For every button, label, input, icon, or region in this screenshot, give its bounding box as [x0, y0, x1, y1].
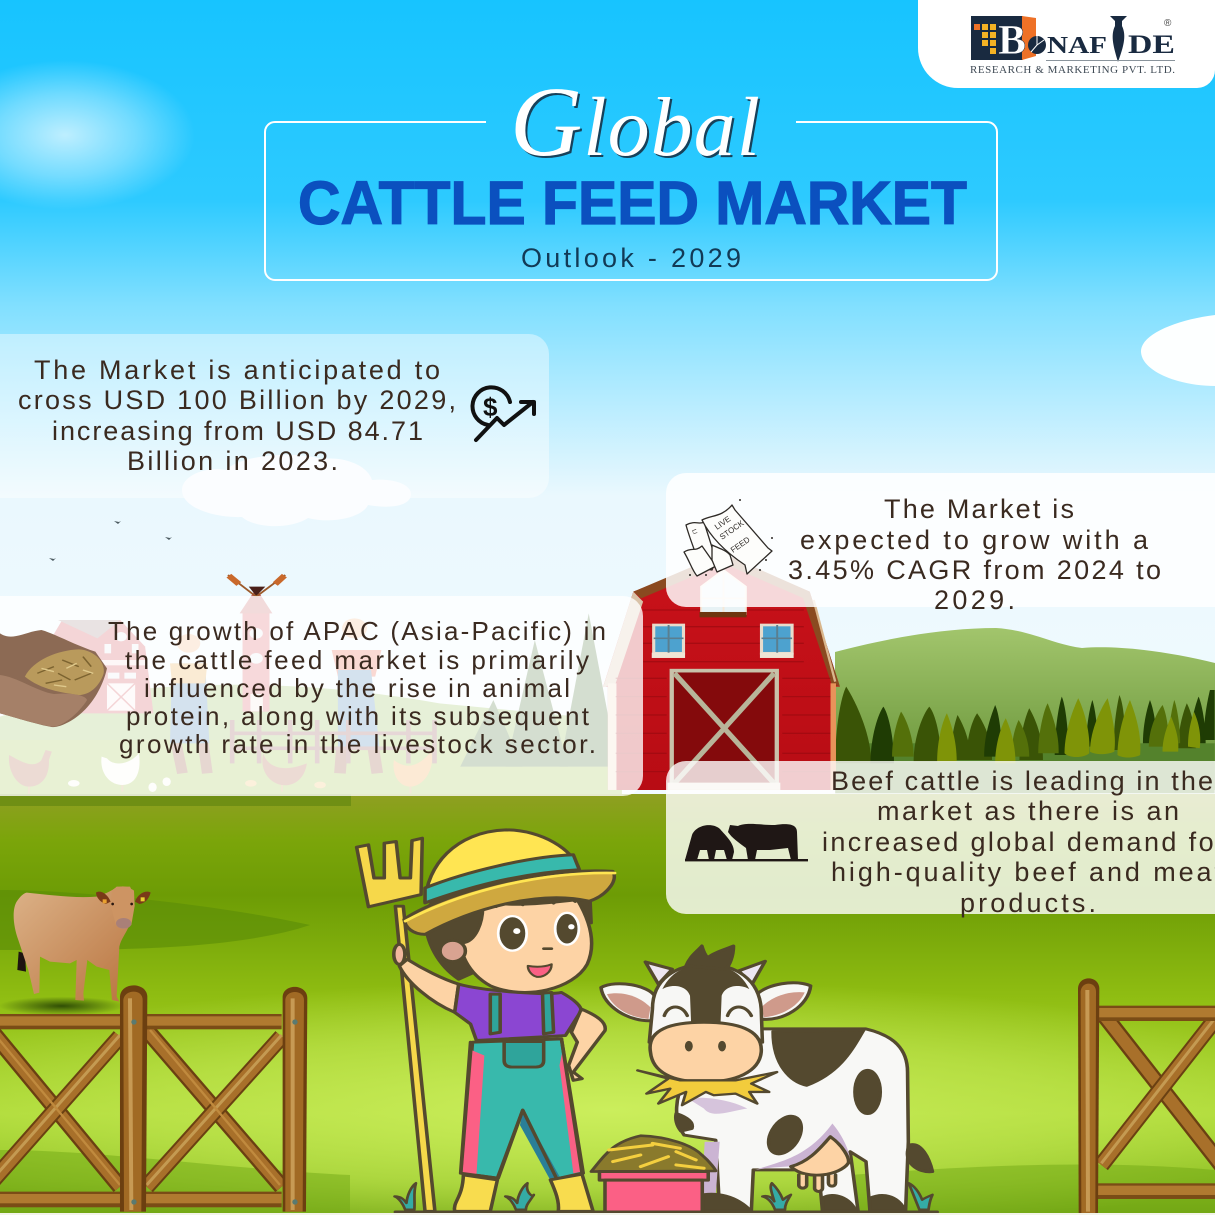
ground: grass field: [0, 794, 1215, 1215]
title frame: [265, 122, 997, 280]
text: beef cattle: Beef cattle is leading in the: [831, 766, 1213, 796]
ground line: [395, 1208, 937, 1215]
hay trough: [591, 1136, 716, 1212]
icon: dollar growth arrow: $: [483, 392, 498, 422]
text: USD 100 billion forecast: increasing from USD 84.71: [52, 416, 423, 446]
icon: livestock feed bags: LI: [690, 529, 698, 536]
cloud: right edge: [1141, 315, 1215, 386]
farmers: [170, 618, 381, 773]
strip: bottom edge: [0, 1213, 1215, 1215]
shirt and arms: [394, 944, 605, 1080]
pitchfork: [357, 838, 435, 1211]
icon: hands holding feed: [0, 630, 107, 727]
logo: wordmark: DE: [1128, 30, 1175, 59]
grass tufts: [395, 1183, 932, 1210]
cow: [601, 946, 932, 1211]
wooden fence: [230, 720, 435, 763]
tree line: [835, 687, 1215, 793]
hill: right side: [835, 628, 1215, 790]
pine trees: [460, 613, 618, 767]
text: CAGR: expected to grow with a: [800, 525, 1149, 555]
fence: left: [0, 985, 307, 1212]
text: beef cattle: market as there is an: [877, 796, 1179, 826]
chickens: [9, 750, 432, 795]
cow body: [677, 1029, 908, 1211]
subheading: Outlook 2029: Outlook - 2029: [521, 243, 741, 273]
text: APAC growth: protein, along with its subsequent: [126, 701, 590, 731]
farmer legs and overalls: [461, 1039, 583, 1180]
fence: right: [1078, 978, 1215, 1213]
panel: USD 100 billion forecast: [0, 334, 549, 498]
barn gable window: [700, 570, 747, 617]
logo: wordmark: NAF: [1047, 33, 1107, 59]
farmer head: [425, 878, 592, 992]
heading: Cattle Feed Market: CATTLE FEED MARKET: [298, 169, 967, 237]
text: CAGR: [788, 494, 1161, 615]
background: sky: [0, 0, 1215, 800]
hay in mouth: [637, 1070, 777, 1105]
icon: livestock feed bags: FEED: [729, 535, 752, 555]
panel: APAC growth: [0, 596, 643, 796]
distant farm scene: [0, 575, 622, 797]
icon: livestock feed bags: LIVE: [713, 514, 732, 532]
barn roof: [603, 553, 840, 790]
panel: CAGR: [666, 473, 1215, 607]
text: APAC growth: The growth of APAC (Asia-Pacific) in: [108, 616, 606, 646]
cow horns and ears: [645, 961, 765, 984]
text: APAC growth: the cattle feed market is primarily: [125, 645, 589, 675]
logo: wordmark: ®: [1164, 18, 1172, 29]
photo: brown cow with shadow: [0, 886, 151, 1015]
text: APAC growth: [108, 616, 606, 759]
text: CAGR: The Market is: [884, 494, 1074, 524]
icon: livestock feed bags: STOCK: [718, 518, 746, 542]
silo and windmill: [228, 575, 285, 712]
logo: B mark: B: [998, 18, 1026, 64]
logo: tagline: RESEARCH & MARKETING PVT. LTD.: [970, 64, 1175, 76]
text: CAGR: 2029.: [934, 585, 1015, 615]
cloud: centre overlapping panel: [182, 455, 411, 526]
panel: beef cattle: [666, 761, 1215, 914]
icon: black cattle silhouettes: [685, 824, 808, 861]
text: APAC growth: growth rate in the livestock sector.: [119, 729, 596, 759]
hat: [404, 830, 615, 934]
birds: [49, 521, 172, 561]
logo card: [918, 0, 1215, 88]
text: beef cattle: products.: [960, 888, 1096, 918]
boots: [454, 1174, 593, 1211]
text: USD 100 billion forecast: The Market is anticipated to: [34, 355, 440, 385]
text: APAC growth: influenced by the rise in animal: [144, 673, 570, 703]
icon: dollar growth arrow: [472, 387, 534, 440]
cloud: blurred top left: [0, 60, 195, 210]
text: beef cattle: increased global demand for: [822, 827, 1215, 857]
logo: wordmark: [1028, 16, 1175, 62]
barn door: [667, 671, 780, 790]
text: CAGR: 3.45% CAGR from 2024 to: [788, 555, 1161, 585]
heading: Global: Global: [510, 66, 760, 177]
barn windows: [652, 625, 794, 658]
illustration: farmer, cow and hay: [357, 830, 937, 1212]
cow head: [649, 964, 762, 1042]
logo: B mark: [971, 16, 1036, 64]
text: beef cattle: [822, 766, 1215, 918]
text: USD 100 billion forecast: Billion in 2023.: [127, 446, 338, 476]
text: USD 100 billion forecast: [18, 355, 456, 476]
small barn: [46, 620, 153, 713]
icon: livestock feed bags: [684, 499, 773, 576]
text: USD 100 billion forecast: cross USD 100 Billion by 2029,: [18, 385, 456, 415]
text: beef cattle: high-quality beef and meat: [831, 857, 1215, 887]
big red barn: [603, 553, 840, 790]
